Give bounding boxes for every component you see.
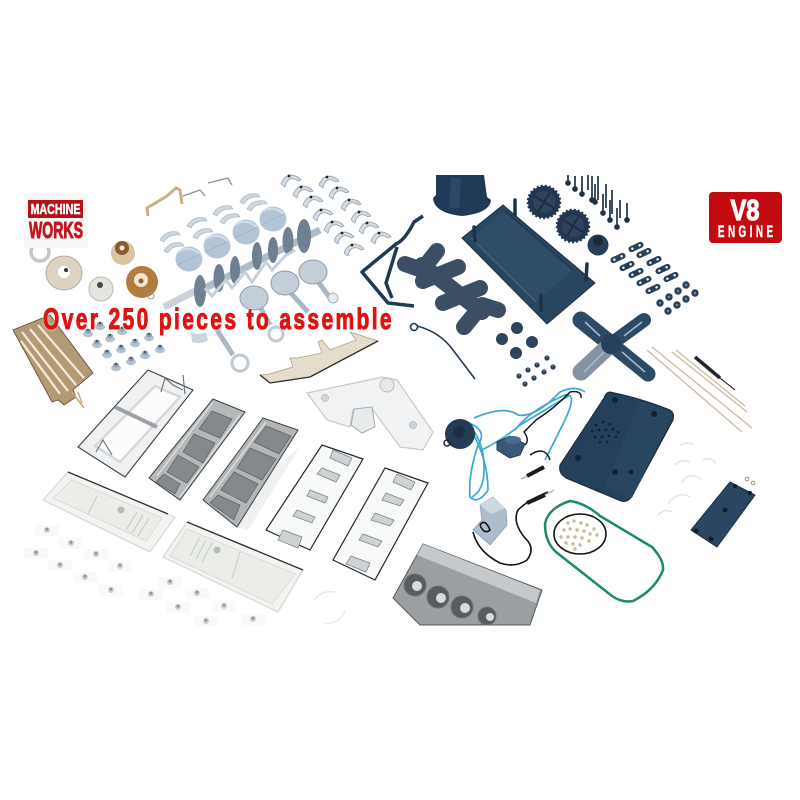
- gold bracket top: [147, 178, 232, 216]
- clear L-shaped cover: [307, 377, 433, 450]
- logo: Machine Works: MACHINE: [30, 202, 81, 218]
- headline: Over 250 pieces to assemble: [43, 304, 392, 336]
- clear cover right: [163, 522, 303, 612]
- black wire: [524, 392, 581, 460]
- gears: [528, 186, 608, 256]
- fan: [581, 320, 648, 374]
- panel: transparent housing parts: [24, 370, 542, 627]
- links: [609, 241, 680, 295]
- nuts: [656, 281, 699, 315]
- round fittings: [31, 241, 158, 301]
- fork bracket: [362, 216, 423, 306]
- clear cover left: [43, 472, 175, 552]
- heat plate: [13, 315, 93, 408]
- grey cylinder head right: [203, 418, 300, 530]
- badge: V8 engine: [709, 192, 782, 243]
- badge: V8 engine: V8: [730, 195, 760, 227]
- speaker box: [560, 392, 674, 501]
- clear tray: [78, 370, 193, 477]
- main tray: [462, 200, 595, 324]
- panel: navy plastic parts: [362, 175, 755, 547]
- screws: [566, 175, 629, 229]
- small motor: [497, 436, 525, 458]
- dipstick: [410, 324, 475, 379]
- gearbox motor and lead: [473, 490, 554, 565]
- timing belt: [545, 501, 663, 601]
- clear engine block: [393, 544, 542, 625]
- lower pistons with rods: [191, 260, 338, 371]
- panel: silver and bronze parts: [13, 175, 391, 408]
- o-ring and beads: [554, 514, 606, 554]
- clear washers: [658, 443, 716, 515]
- crankshaft: [164, 219, 320, 307]
- clear frame left: [266, 445, 363, 550]
- panel: electrical parts: [444, 388, 716, 601]
- half-moon bearings: [281, 175, 391, 256]
- clear frame right: [333, 468, 428, 580]
- rods and screwdriver: [647, 347, 752, 432]
- audio jack upper: [521, 467, 544, 479]
- badge: V8 engine: ENGINE: [718, 222, 773, 241]
- manifold: [405, 251, 498, 327]
- buzzer: [444, 419, 475, 449]
- blue wires: [458, 388, 585, 500]
- small caps grid: [83, 322, 165, 371]
- logo: Machine Works: WORKS: [29, 217, 83, 243]
- clear disc: [315, 592, 345, 624]
- logo: Machine Works: [24, 193, 88, 248]
- cylinders and studs: [496, 322, 556, 387]
- upper pistons: [160, 194, 286, 272]
- comb bracket: [260, 332, 378, 383]
- grey cylinder head left: [149, 399, 245, 500]
- clear strips with bumps: [24, 525, 265, 627]
- air filter cup: [433, 175, 491, 216]
- small plate: [691, 477, 755, 547]
